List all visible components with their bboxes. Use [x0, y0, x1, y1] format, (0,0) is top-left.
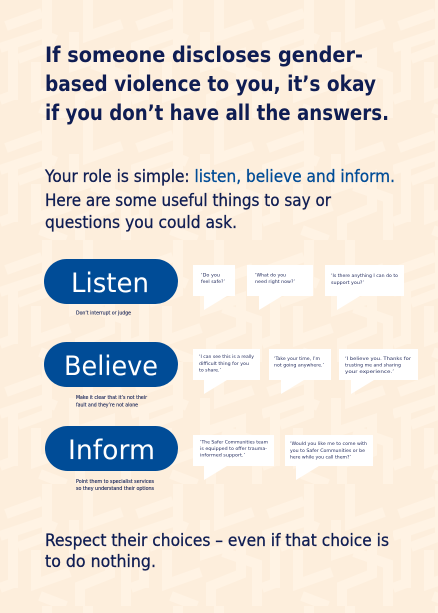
speech bubble: take your time	[269, 349, 331, 394]
pill: believe: Believe	[64, 351, 158, 382]
caption: inform: so they understand their options	[76, 486, 154, 492]
caption: inform	[76, 479, 154, 492]
caption: listen: Don’t interrupt or judge	[76, 310, 131, 316]
caption: inform: Point them to specialist services	[76, 479, 154, 485]
title: based violence to you, it’s okay	[45, 72, 376, 97]
speech bubble: what do you need	[247, 265, 313, 310]
speech bubble: safer communities team	[193, 435, 274, 480]
caption: believe: fault and they’re not alone	[76, 402, 138, 408]
speech bubble: would you like me to come: you to Safer Communities or be	[290, 448, 365, 454]
speech bubble: I believe you: your experience.’	[345, 369, 395, 375]
speech bubble: difficult thing: to share.’	[199, 368, 222, 374]
speech bubble: what do you need: need right now?’	[255, 279, 296, 285]
title: If someone discloses gender-	[45, 43, 363, 68]
speech bubble: do you feel safe: feel safe?’	[201, 279, 226, 285]
pill: inform: Inform	[68, 435, 155, 466]
speech bubble: safer communities team: ‘The Safer Communities team	[200, 440, 269, 446]
speech bubble: difficult thing: difficult thing for you	[199, 361, 249, 367]
speech bubble: do you feel safe	[193, 265, 235, 310]
speech bubble: anything I can do: ‘Is there anything I can do to	[331, 273, 398, 279]
speech bubble: safer communities team: is equipped to offer trauma-	[200, 446, 267, 452]
pill: believe	[44, 342, 178, 387]
pill: inform	[45, 426, 178, 471]
intro text	[44, 167, 395, 232]
title	[45, 43, 389, 126]
speech bubble: would you like me to come: here while you call them?’	[290, 454, 352, 460]
speech bubble: take your time: not going anywhere.’	[274, 362, 325, 368]
speech bubble: difficult thing: ‘I can see this is a really	[199, 354, 254, 360]
closing statement	[45, 531, 389, 571]
speech bubble: anything I can do: support you?’	[331, 280, 365, 286]
speech bubble: I believe you	[339, 349, 418, 394]
pill: listen	[44, 259, 178, 304]
closing statement: Respect their choices – even if that choice is	[45, 531, 389, 550]
caption: believe: Make it clear that it’s not their	[76, 395, 147, 401]
speech bubble: would you like me to come: ‘Would you like me to come with	[290, 441, 367, 447]
intro text: Here are some useful things to say or	[45, 191, 331, 210]
speech bubble: take your time: ‘Take your time, I’m	[274, 356, 321, 362]
speech bubble: anything I can do	[325, 265, 404, 310]
closing statement: to do nothing.	[45, 552, 156, 571]
speech bubble: safer communities team: informed support.’	[200, 452, 246, 458]
speech bubble: would you like me to come	[285, 435, 373, 480]
speech bubble: difficult thing	[193, 349, 260, 394]
speech bubble: do you feel safe: ‘Do you	[201, 272, 220, 278]
caption: believe	[76, 395, 147, 408]
speech bubble: what do you need: ‘What do you	[255, 272, 286, 278]
pill: listen: Listen	[71, 268, 149, 299]
speech bubble: I believe you: ‘I believe you. Thanks for	[345, 356, 411, 362]
speech bubble: I believe you: trusting me and sharing	[345, 362, 401, 368]
intro text: Your role is simple: listen, believe and inform.	[44, 167, 395, 186]
intro text: questions you could ask.	[45, 213, 237, 232]
